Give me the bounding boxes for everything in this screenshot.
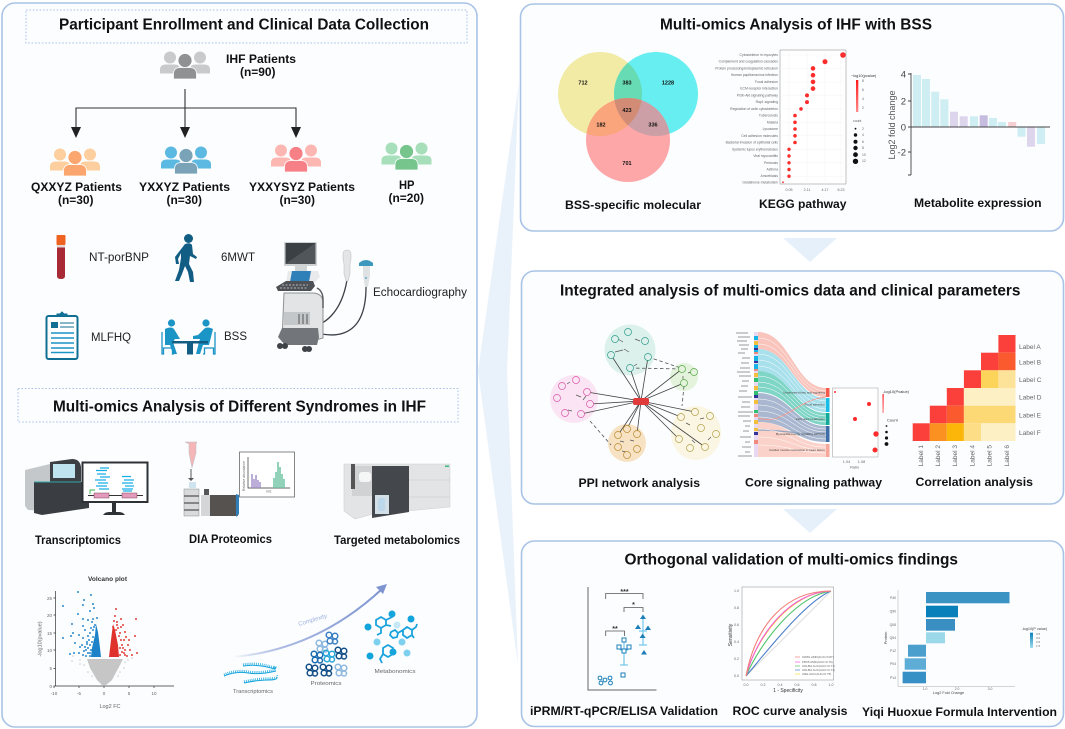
group: healthy participants (382, 142, 432, 205)
chart: core signaling sankey: -log10(Pvalue) (883, 389, 910, 394)
icon: protein structures (306, 632, 347, 687)
chart: KEGG pathway dot plot: Viral myocarditis (753, 154, 778, 158)
chart: KEGG pathway dot plot: −log10(pvalue) (851, 74, 877, 78)
icon: questionnaire clipboard (46, 312, 78, 359)
chart: ROC curves: 1.0 (734, 589, 739, 593)
label: BSS: BSS (224, 331, 247, 343)
arrows: cohort split (71, 89, 301, 138)
chart: volcano plot: -5 (77, 691, 81, 696)
chart: Yiqi Huoxue protein bars: 3.5 (1036, 632, 1041, 636)
chart: KEGG pathway dot plot: 0.05 (786, 188, 792, 192)
chart: KEGG pathway dot plot: Amoebiasis (760, 174, 778, 178)
chart: Yiqi Huoxue protein bars: Q08 (890, 623, 896, 627)
chart: KEGG pathway dot plot: Complement and coagulation cascades (719, 60, 778, 64)
chart: metabolite expression bars: -2 (898, 148, 906, 158)
chart: correlation heatmap (913, 335, 1042, 466)
chart: KEGG pathway dot plot: Human papillomavirus infection (731, 73, 778, 77)
chart: ROC curves: CDH5A AUC(AUC=0.71) (802, 668, 835, 672)
chart: KEGG pathway dot plot: 12 (862, 159, 866, 163)
chart: KEGG pathway dot plot: Bacterial invasion of epithelial cells (726, 140, 778, 144)
chart: core signaling sankey: Unsaturated fatty acid signaling (783, 390, 825, 394)
chart: core signaling sankey: Focal adhesion (805, 402, 825, 406)
panel: multi-omics analysis of IHF with BSS (520, 4, 1064, 231)
icon: DIA mass spectrometer (184, 442, 239, 517)
chart: volcano plot: 0 (49, 684, 52, 689)
chart: metabolite expression bars: Log2 fold change (887, 90, 897, 160)
chart: correlation heatmap: Label A (1019, 344, 1041, 351)
chart: validation scatter: ** (612, 626, 618, 633)
chart: volcano plot: -log10(pvalue) (38, 621, 44, 657)
group: YXXYZ patients: (n=30) (166, 195, 202, 207)
chart: core signaling sankey: 1.04 (843, 460, 850, 464)
chart: Yiqi Huoxue protein bars: P40 (890, 596, 896, 600)
chart: PPI network (550, 324, 721, 462)
chart: Yiqi Huoxue protein bars: 1.5 (1036, 644, 1041, 648)
chart: core signaling sankey: Count (887, 418, 899, 422)
chart: volcano plot: 20 (47, 613, 52, 618)
chart: volcano plot (38, 576, 174, 710)
chart: correlation heatmap: Label D (1019, 394, 1042, 402)
chart: correlation heatmap: Label 1 (918, 445, 925, 466)
chart: core signaling sankey: 1.08 (858, 460, 865, 464)
chart: ROC curves: 0.4 (734, 640, 739, 644)
chart: Yiqi Huoxue protein bars: 3.0 (1036, 636, 1041, 640)
chart: validation scatter: * (632, 602, 635, 609)
chart: ROC curves: 0.2 (760, 683, 766, 687)
chart: venn diagram: 336 (648, 122, 658, 128)
chart: KEGG pathway dot plot: 4.17 (822, 188, 828, 192)
chart: KEGG pathway dot plot: 4 (862, 133, 864, 137)
chart: Yiqi Huoxue protein bars: Protein (883, 632, 888, 644)
label: correlation analysis: Correlation analysis (916, 477, 1033, 489)
group: YXXYZ patients: YXXYZ Patients (139, 182, 230, 194)
chart: venn diagram: 712 (578, 80, 588, 86)
icon: ultrasound machine (276, 242, 373, 352)
chart: KEGG pathway dot plot: Lysosome (763, 127, 778, 131)
heading: Integrated analysis of multi-omics data and clinical parameters (560, 282, 1020, 300)
chart: ROC curves: FBX5 AMD(AUC=0.76) (802, 660, 833, 664)
chart: venn diagram: 182 (596, 122, 606, 128)
label: MLFHQ: MLFHQ (91, 332, 131, 344)
chart: KEGG pathway dot plot: Cytoskeleton in myocytes (740, 53, 778, 57)
chart: Yiqi Huoxue protein bars: 2.5 (1036, 640, 1041, 644)
chart: venn diagram: 383 (622, 80, 632, 86)
label: ROC curve analysis: ROC curve analysis (732, 706, 848, 718)
chart: ROC curves: 0.0 (744, 683, 748, 687)
chart: KEGG pathway dot plot: 4 (862, 97, 864, 101)
group: QXXYZ patients (31, 148, 122, 207)
group: healthy participants: HP (399, 180, 415, 192)
chart: metabolite expression bars (887, 70, 1050, 175)
chart: correlation heatmap: Label 2 (935, 445, 942, 466)
icon: transcriptomics sequencer (25, 459, 89, 515)
chart: ROC curves: 0.6 (794, 683, 800, 687)
label: IHF patients: (n=90) (240, 67, 276, 79)
heading box: enrollment (26, 10, 467, 43)
group: QXXYZ patients: (n=30) (58, 195, 94, 207)
icon: IHF patients group (160, 52, 210, 79)
chart: ROC curves: 1 - Specificity (773, 688, 803, 694)
chart: Yiqi Huoxue protein bars: -log10(P value) (1022, 627, 1048, 631)
panel: participant enrollment and multi-omics of syndromes (2, 3, 477, 727)
chart: Yiqi Huoxue protein bars: P04 (890, 662, 896, 666)
chart: KEGG pathway dot plot: Glutathione metabolism (742, 180, 778, 184)
chart: volcano plot: 5 (49, 666, 52, 671)
chart: volcano plot: Log2 FC (99, 704, 121, 710)
chart: ROC curves: CDH5A AUC(AUC=0.77) (802, 664, 835, 668)
chart: correlation heatmap: Label B (1019, 360, 1041, 366)
label: metabolite expression: Metabolite expression (914, 198, 1042, 210)
chart: correlation heatmap: Label 4 (970, 445, 976, 466)
chart: Yiqi Huoxue protein bars: 2.0 (955, 687, 959, 691)
chart: metabolite expression bars: 0 (901, 122, 906, 134)
icon: protein structures: Proteomics (310, 681, 342, 687)
chart: Yiqi Huoxue protein bars: 1.0 (923, 687, 927, 691)
chart: correlation heatmap: Label 6 (1004, 445, 1011, 466)
label: transcriptomics: Transcriptomics (35, 535, 121, 547)
background connector wedge (478, 82, 519, 665)
label: NT-porBNP: NT-porBNP (89, 252, 149, 264)
chart: Yiqi Huoxue protein bars: 3.0 (988, 687, 992, 691)
chart: ROC curves (728, 587, 835, 694)
icon: sequencing monitor (82, 462, 148, 515)
chart: mass spectrum inset (240, 452, 294, 497)
chart: correlation heatmap: Label E (1019, 412, 1042, 420)
label: IHF patients (226, 54, 296, 79)
chart: KEGG pathway dot plot (715, 50, 877, 192)
chart: volcano plot: 15 (47, 631, 52, 636)
chart: core signaling sankey: Ratio (850, 466, 859, 470)
panel: orthogonal validation (522, 541, 1064, 726)
arrow: panel 2 to panel 3 (783, 509, 837, 533)
chart: KEGG pathway dot plot: Asthma (766, 168, 778, 172)
chart: ROC curves: 0.4 (778, 683, 782, 687)
chart: KEGG pathway dot plot: Protein processing/endoplasmic reticulum (715, 66, 778, 70)
chart: ROC curves: CD8G AMD(AUC=0.87) (802, 655, 834, 659)
chart: volcano plot: 10 (151, 691, 157, 696)
chart: core signaling sankey: Myocardial energy signaling pathway (776, 432, 825, 436)
chart: KEGG pathway dot plot: count (853, 119, 861, 123)
chart: KEGG pathway dot plot: 8 (862, 79, 864, 83)
chart: KEGG pathway dot plot: 10 (862, 153, 866, 157)
icon: targeted metabolomics instrument (344, 464, 450, 519)
chart: KEGG pathway dot plot: Malaria (767, 120, 778, 124)
chart: correlation heatmap: Label C (1019, 377, 1042, 384)
chart: KEGG pathway dot plot: Cell adhesion molecules (741, 134, 778, 138)
label: PPI network analysis: PPI network analysis (578, 478, 700, 490)
chart: KEGG pathway dot plot: Regulation of actin cytoskeleton (730, 107, 778, 111)
heading: Multi-omics Analysis of IHF with BSS (660, 16, 932, 34)
chart: venn diagram: 1228 (662, 80, 674, 86)
chart: volcano plot: Volcano plot (88, 576, 128, 583)
chart: volcano plot: 10 (47, 648, 52, 653)
chart: Yiqi Huoxue protein bars: Log2 Fold Change (933, 691, 964, 695)
chart: KEGG pathway dot plot: Focal adhesion (755, 80, 778, 84)
chart: correlation heatmap: Label 5 (986, 445, 994, 466)
chart: KEGG pathway dot plot: Pertussis (764, 161, 778, 165)
label: targeted metabolomics: Targeted metabolomics (334, 535, 460, 547)
chart: validation scatter: *** (620, 589, 629, 596)
group: QXXYZ patients: QXXYZ Patients (31, 182, 122, 194)
chart: KEGG pathway dot plot: Rap1 signaling (756, 100, 778, 104)
chart: mass spectrum inset: Relative abundance (242, 461, 246, 491)
chart: ROC curves: 1.0 (828, 683, 834, 687)
chart: ROC curves: 0.0 (734, 674, 739, 678)
group: YXXYSYZ patients: (n=30) (280, 195, 315, 207)
chart: venn diagram: 701 (622, 161, 632, 167)
icon: transcript strands: Transcriptomics (233, 689, 273, 695)
chart: venn diagram (558, 52, 698, 182)
icon: blood tube (56, 235, 66, 279)
group: YXXYSYZ patients (249, 144, 355, 207)
chart: validation scatter (588, 587, 656, 690)
heading: Orthogonal validation of multi-omics findings (624, 552, 958, 568)
label: 6MWT: 6MWT (221, 252, 255, 264)
icon: metabolite molecules (364, 610, 417, 675)
icon: transcript strands (224, 664, 277, 695)
label: validation methods: iPRM/RT-qPCR/ELISA Validation (530, 706, 718, 718)
label: core signaling pathway: Core signaling pathway (745, 478, 883, 490)
icon: walking person (175, 234, 197, 282)
chart: mass spectrum inset: m/z (266, 490, 272, 494)
chart: core signaling sankey: Fatty acid metabolism (796, 417, 825, 421)
chart: KEGG pathway dot plot: ECM-receptor interaction (740, 87, 778, 91)
chart: KEGG pathway dot plot: Systemic lupus erythematosus (732, 147, 778, 151)
chart: correlation heatmap: Label F (1019, 430, 1041, 437)
panel: integrated analysis (522, 271, 1064, 504)
chart: KEGG pathway dot plot: 6.23 (838, 188, 844, 192)
chart: KEGG pathway dot plot: 2.11 (804, 188, 810, 192)
chart: ROC curves: 0.2 (734, 657, 739, 661)
arrow: complexity curve: Complexity (298, 613, 328, 628)
chart: KEGG pathway dot plot: 6 (862, 88, 864, 92)
arrow: panel 1 to panel 2 (783, 238, 837, 262)
heading box: multi-omics of syndromes: Multi-omics Analysis of Different Syndromes in IHF (53, 398, 426, 416)
chart: KEGG pathway dot plot: 8 (862, 146, 864, 150)
chart: Yiqi Huoxue protein bars: P14 (890, 676, 896, 680)
chart: volcano plot: 25 (47, 596, 52, 601)
heading box: multi-omics of syndromes (18, 388, 458, 422)
chart: ROC curves: 0.8 (734, 606, 739, 610)
group: YXXYSYZ patients: YXXYSYZ Patients (249, 182, 355, 194)
chart: Yiqi Huoxue protein bars: P12 (890, 649, 896, 653)
label: IHF patients: IHF Patients (226, 54, 296, 66)
chart: core signaling sankey (736, 332, 910, 470)
chart: Yiqi Huoxue protein bars: Q90 (890, 610, 896, 614)
chart: volcano plot: -10 (51, 691, 58, 696)
chart: ROC curves: CRE AUC(AUC=0.75) (802, 672, 831, 676)
chart: KEGG pathway dot plot: 6 (862, 140, 864, 144)
heading box: enrollment: Participant Enrollment and Clinical Data Collection (59, 16, 429, 34)
chart: volcano plot: 0 (103, 691, 106, 696)
label: echocardiography: Echocardiography (373, 287, 467, 299)
chart: core signaling sankey: Cardiac muscle contraction in heart failure (769, 448, 825, 452)
chart: venn diagram: 423 (622, 108, 632, 114)
chart: KEGG pathway dot plot: 2 (862, 106, 864, 110)
chart: ROC curves: Sensitivity (728, 623, 734, 646)
label: Yiqi Huoxue intervention: Yiqi Huoxue Formula Intervention (862, 707, 1057, 719)
chart: metabolite expression bars: 2 (901, 96, 906, 108)
icon: metabolite molecules: Metabonomics (374, 669, 416, 675)
chart: ROC curves: 0.8 (812, 683, 816, 687)
chart: KEGG pathway dot plot: 2 (862, 127, 864, 131)
arrow: complexity curve (233, 584, 387, 657)
label: DIA proteomics: DIA Proteomics (189, 534, 272, 546)
chart: Yiqi Huoxue protein bars: Q54 (890, 636, 896, 640)
chart: ROC curves: 0.6 (734, 623, 739, 627)
chart: KEGG pathway dot plot: Tuberculosis (759, 114, 778, 118)
chart: metabolite expression bars: 4 (901, 70, 906, 80)
chart: KEGG pathway dot plot: PI3K-Akt signaling pathway (737, 93, 778, 97)
group: YXXYZ patients (139, 146, 230, 207)
icon: BSS consultation (162, 319, 215, 354)
chart: correlation heatmap: Label 3 (952, 445, 959, 466)
label: KEGG pathway: KEGG pathway (759, 199, 847, 211)
group: healthy participants: (n=20) (388, 193, 424, 205)
label: BSS-specific molecular: BSS-specific molecular (565, 200, 702, 212)
chart: Yiqi Huoxue protein bars (883, 590, 1048, 695)
chart: volcano plot: 5 (128, 691, 131, 696)
